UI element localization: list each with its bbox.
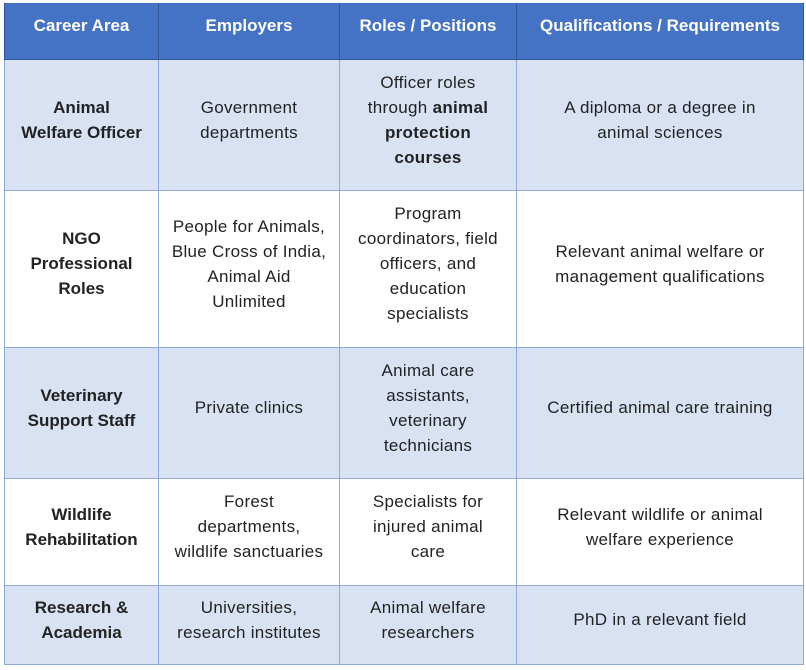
- row: animal welfare officer: courses: [394, 148, 462, 166]
- row: animal welfare officer: through animal: [368, 98, 488, 116]
- row: research: Academia: [41, 622, 122, 642]
- row: ngo: People for Animals,: [173, 216, 325, 236]
- row: wildlife: Relevant wildlife or animal: [557, 504, 763, 524]
- row: veterinary: [5, 348, 803, 478]
- row: wildlife: welfare experience: [586, 530, 734, 548]
- row: ngo: coordinators, field: [358, 229, 498, 248]
- row: ngo: NGO: [62, 229, 101, 248]
- row: ngo: specialists: [387, 304, 469, 323]
- row: wildlife: [25, 492, 763, 561]
- row: ngo: Program: [394, 204, 462, 223]
- row: ngo: officers, and: [380, 254, 476, 273]
- row: animal welfare officer: departments: [200, 122, 298, 142]
- header row: Career Area: [34, 16, 129, 35]
- row: veterinary: Private clinics: [195, 398, 303, 417]
- row: ngo: [30, 204, 765, 323]
- row: animal welfare officer: A diploma or a degree in: [564, 98, 756, 116]
- row: ngo: Blue Cross of India,: [172, 242, 326, 260]
- row: wildlife: Forest: [224, 492, 274, 511]
- row: wildlife: wildlife sanctuaries: [175, 542, 323, 561]
- row: veterinary: Animal care: [381, 360, 475, 380]
- row: veterinary: Support Staff: [28, 410, 135, 430]
- row: animal welfare officer: animal sciences: [597, 122, 723, 142]
- row: research: [5, 586, 803, 664]
- row: veterinary: veterinary: [389, 410, 467, 430]
- row: animal welfare officer: protection: [385, 122, 471, 142]
- row: wildlife: Specialists for: [373, 492, 483, 511]
- row: animal welfare officer: [5, 60, 803, 190]
- row: ngo: Professional: [30, 254, 133, 273]
- row: animal welfare officer: Government: [201, 98, 297, 116]
- row: research: PhD in a relevant field: [573, 610, 747, 629]
- header row: Employers: [206, 16, 292, 35]
- row: veterinary: Certified animal care training: [547, 398, 773, 417]
- row: animal welfare officer: Welfare Officer: [21, 122, 142, 142]
- row: research: researchers: [381, 622, 475, 642]
- row: wildlife: care: [411, 542, 445, 561]
- row: wildlife: Wildlife: [51, 504, 112, 524]
- row: veterinary: technicians: [384, 436, 472, 454]
- row: veterinary: assistants,: [386, 386, 470, 404]
- row: research: Animal welfare: [370, 598, 486, 616]
- header row: Roles / Positions: [360, 16, 496, 35]
- row: ngo: Unlimited: [212, 292, 286, 310]
- row: veterinary: Veterinary: [40, 386, 123, 404]
- row: wildlife: Rehabilitation: [25, 530, 138, 548]
- row: wildlife: departments,: [198, 517, 300, 536]
- row: research: Research &: [35, 598, 128, 616]
- row: research: Universities,: [201, 598, 297, 616]
- row: ngo: Relevant animal welfare or: [555, 242, 765, 260]
- row: ngo: Animal Aid: [207, 266, 291, 286]
- row: ngo: management qualifications: [555, 266, 765, 286]
- header row: Qualifications / Requirements: [540, 16, 780, 35]
- row: research: research institutes: [177, 622, 321, 642]
- row: ngo: Roles: [58, 279, 105, 298]
- row: ngo: education: [390, 279, 466, 298]
- row: animal welfare officer: Animal: [53, 98, 110, 116]
- row: animal welfare officer: Officer roles: [380, 72, 476, 92]
- row: wildlife: injured animal: [373, 517, 483, 536]
